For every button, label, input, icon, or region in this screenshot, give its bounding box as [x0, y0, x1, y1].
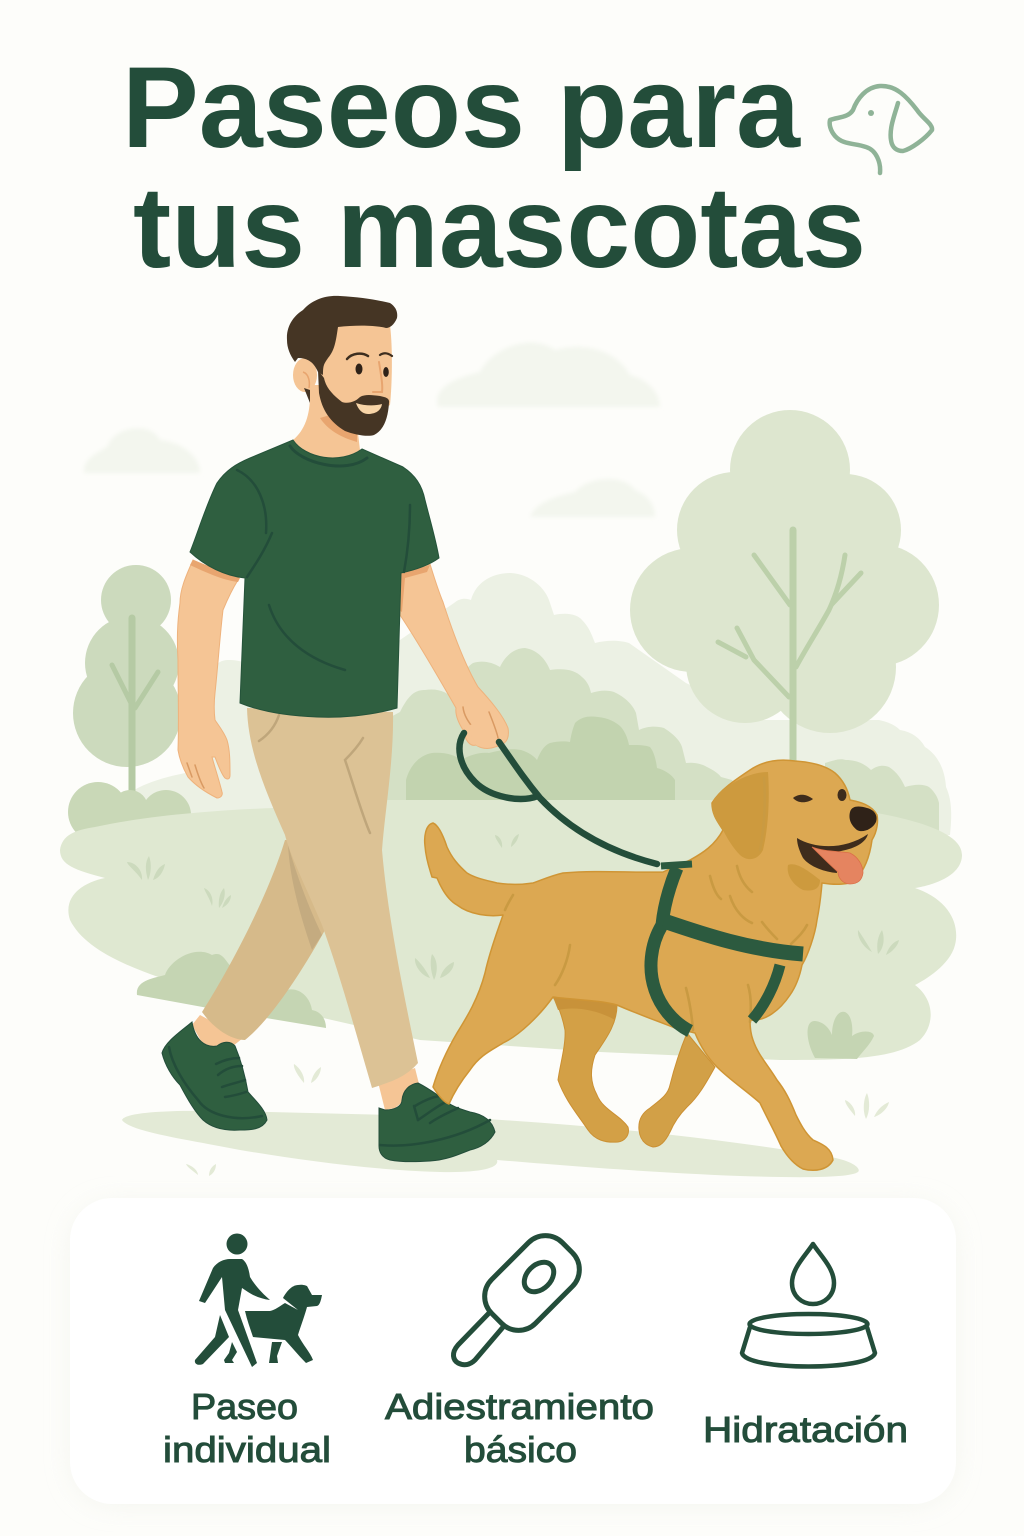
- t-shirt: [190, 440, 439, 717]
- trousers back leg: [202, 840, 330, 1040]
- grass tufts: [127, 834, 899, 980]
- fingers over leash: [470, 724, 497, 747]
- dog eyes: [793, 789, 846, 802]
- back ankle: [192, 1015, 243, 1050]
- trouser leg shadow: [288, 845, 322, 950]
- meadow mounds: [60, 800, 962, 1060]
- shoe: back: [162, 1022, 267, 1130]
- dog body: [425, 760, 877, 1170]
- label: Paseo individual: individual: [163, 1429, 331, 1470]
- left tree: [73, 565, 181, 822]
- trouser creases: [259, 715, 370, 833]
- label: Adiestramiento básico: Adiestramiento: [385, 1386, 654, 1427]
- grass tufts on path: [186, 1064, 889, 1176]
- nose: [373, 362, 382, 392]
- label: Hidratación: Hidratación: [703, 1409, 908, 1450]
- cheek shade: [788, 864, 820, 891]
- icon: brush: [453, 1226, 589, 1365]
- dog mouth: [797, 834, 868, 873]
- big tree: [630, 410, 939, 765]
- hair: [287, 296, 397, 375]
- left arm: [177, 560, 238, 798]
- dog ear: [712, 772, 769, 859]
- neck shadow: [320, 415, 357, 442]
- icon: dog head outline: [830, 86, 932, 173]
- trousers front leg: [247, 708, 418, 1088]
- far front leg: [639, 1033, 715, 1147]
- harness: [651, 864, 803, 1031]
- sleeve shadow: [190, 560, 430, 612]
- far rear leg: [553, 995, 628, 1142]
- medium background bushes: [385, 648, 939, 835]
- face: [318, 325, 392, 430]
- icon: water drop and bowl: [742, 1244, 875, 1366]
- man walking: [162, 296, 508, 1162]
- background clouds: [84, 343, 660, 517]
- label: Adiestramiento básico: básico: [464, 1429, 577, 1470]
- lower left bushes: [68, 782, 191, 842]
- ear: [293, 358, 317, 392]
- eyes and brows: [347, 353, 392, 377]
- label: Paseo individual: [163, 1386, 331, 1470]
- dark background bushes: [406, 717, 675, 800]
- front ankle: [378, 1068, 420, 1110]
- small bush lower right: [808, 1012, 874, 1059]
- services panel: [70, 1198, 956, 1504]
- right arm: [400, 564, 508, 748]
- head and face: [287, 296, 397, 436]
- label: Adiestramiento básico: [385, 1386, 654, 1470]
- light background bushes: [115, 573, 951, 835]
- fur marks: [505, 778, 807, 1030]
- finger lines: [187, 707, 498, 788]
- panel shadow: [74, 1206, 952, 1502]
- ground shadow: [122, 1111, 859, 1177]
- neck: [293, 385, 360, 458]
- title: Paseos para: [122, 44, 801, 172]
- beard: [304, 370, 389, 436]
- mouth: [356, 403, 382, 414]
- title: tus mascotas: [133, 164, 866, 292]
- far rear leg shade: [553, 994, 617, 1020]
- golden retriever: [425, 760, 877, 1170]
- leash: [459, 733, 657, 864]
- dark bush lower left: [137, 952, 326, 1028]
- label: Paseo individual: Paseo: [191, 1386, 298, 1427]
- tongue: [812, 847, 863, 884]
- title: [122, 44, 866, 292]
- shoe: front: [379, 1083, 495, 1162]
- icon: person walking dog: [195, 1234, 322, 1367]
- nose: [849, 807, 877, 831]
